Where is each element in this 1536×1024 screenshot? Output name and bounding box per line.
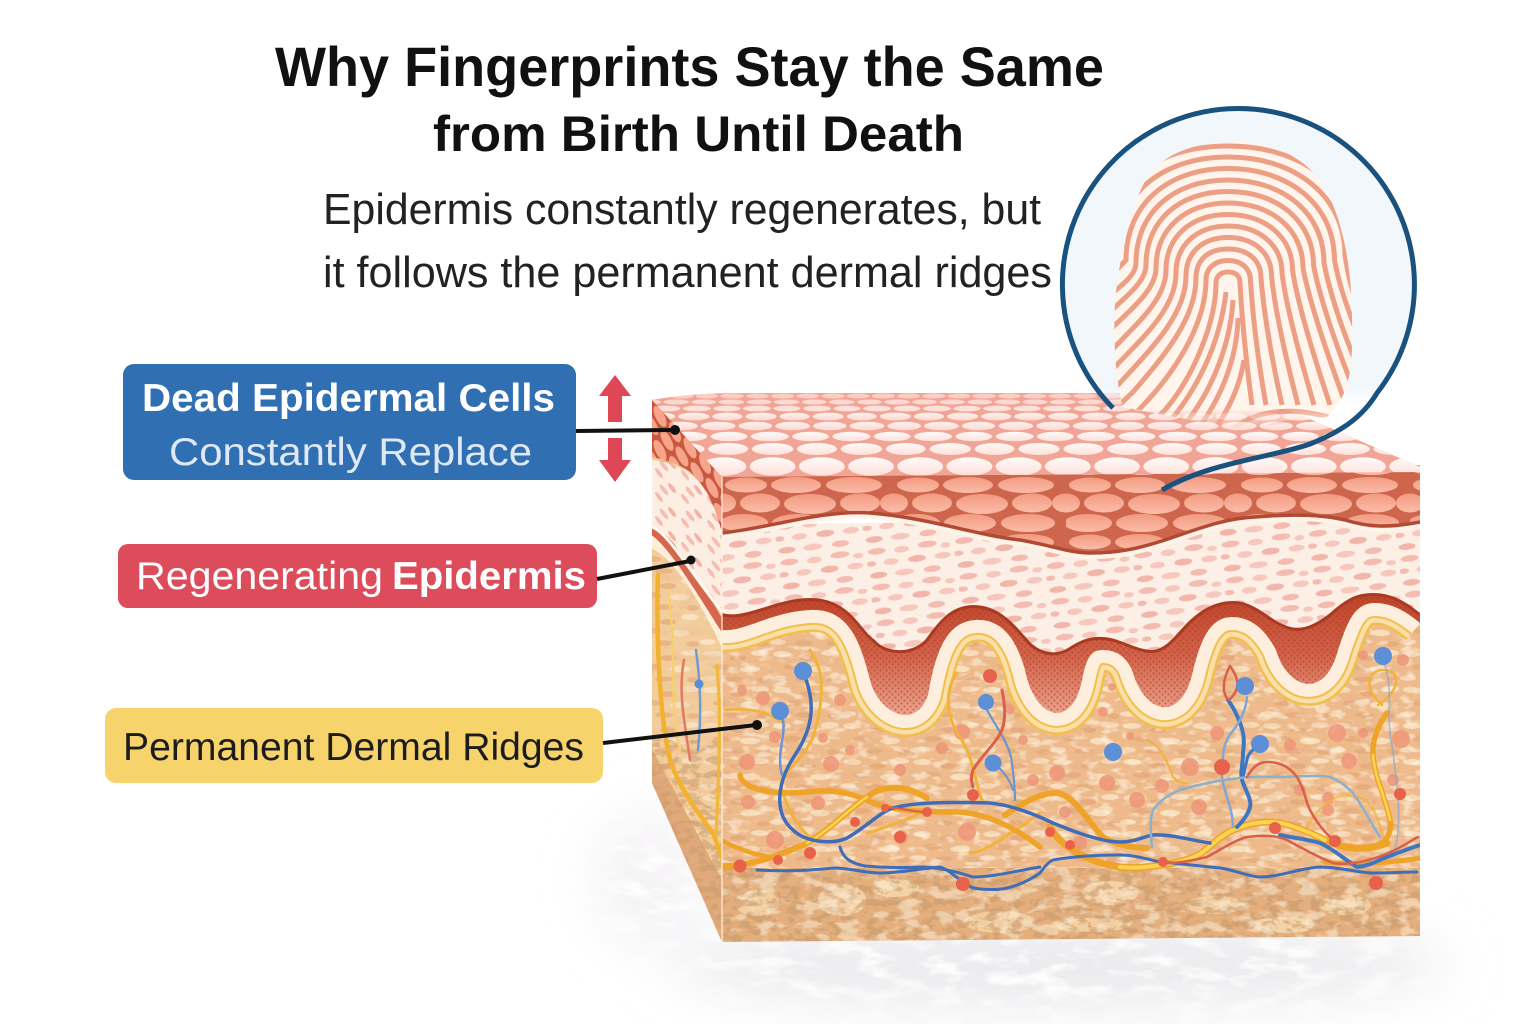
subtitle: it follows the permanent dermal ridges <box>323 248 1052 297</box>
red basal layer <box>722 593 1420 715</box>
thick yellow nerves <box>717 713 1420 868</box>
left face nerves and vessels <box>658 575 726 868</box>
skin cross-section block <box>650 390 1422 946</box>
blue vessel nodes <box>771 647 1392 772</box>
leader line: dead cells <box>576 425 680 435</box>
arrow: up and down renewal <box>599 375 631 482</box>
block edge highlight <box>721 477 723 942</box>
red cell band <box>722 465 1420 553</box>
label: dead epidermal cells: Dead Epidermal Cells <box>142 377 555 420</box>
floor shadow <box>595 810 1450 1010</box>
magnifier lens fill <box>1065 111 1412 400</box>
dermal round cells <box>737 650 1410 850</box>
nerves and blood vessels <box>717 650 1420 890</box>
dermis layer <box>722 624 1420 868</box>
leader line: permanent dermal ridges <box>603 720 762 743</box>
red vessels <box>885 666 1418 864</box>
label: dead epidermal cells <box>123 364 576 480</box>
label: dead epidermal cells: Constantly Replace <box>169 431 532 474</box>
top surface: dead epidermal cells <box>650 390 1422 480</box>
subtitle <box>323 185 1052 297</box>
label: regenerating epidermis: Regenerating <box>136 555 383 598</box>
title: from Birth Until Death <box>433 106 964 162</box>
yellow nerve highlights <box>807 755 1390 868</box>
label: regenerating epidermis: Epidermis <box>392 555 586 598</box>
label: regenerating epidermis <box>118 544 597 608</box>
title: Why Fingerprints Stay the Same <box>275 35 1104 98</box>
subtitle: Epidermis constantly regenerates, but <box>323 185 1041 234</box>
blue vessels <box>757 660 1420 890</box>
label: permanent dermal ridges: Permanent Dermal Ridges <box>123 726 584 769</box>
left side face <box>650 395 726 945</box>
title <box>275 35 1104 162</box>
front face <box>717 465 1422 946</box>
fingerprint pattern <box>1114 142 1352 426</box>
dermal ridge outlines <box>722 603 1420 715</box>
label: permanent dermal ridges <box>105 708 603 783</box>
pale regenerating epidermis <box>722 515 1420 652</box>
magnifier circle with fingerprint <box>1060 109 1414 490</box>
magnifier outline with tail <box>1062 109 1414 490</box>
hypodermis fat layer <box>720 868 1422 946</box>
red vessel nodes <box>734 669 1406 891</box>
leader line: regenerating epidermis <box>597 556 696 579</box>
thin yellow nerves <box>725 650 1396 853</box>
